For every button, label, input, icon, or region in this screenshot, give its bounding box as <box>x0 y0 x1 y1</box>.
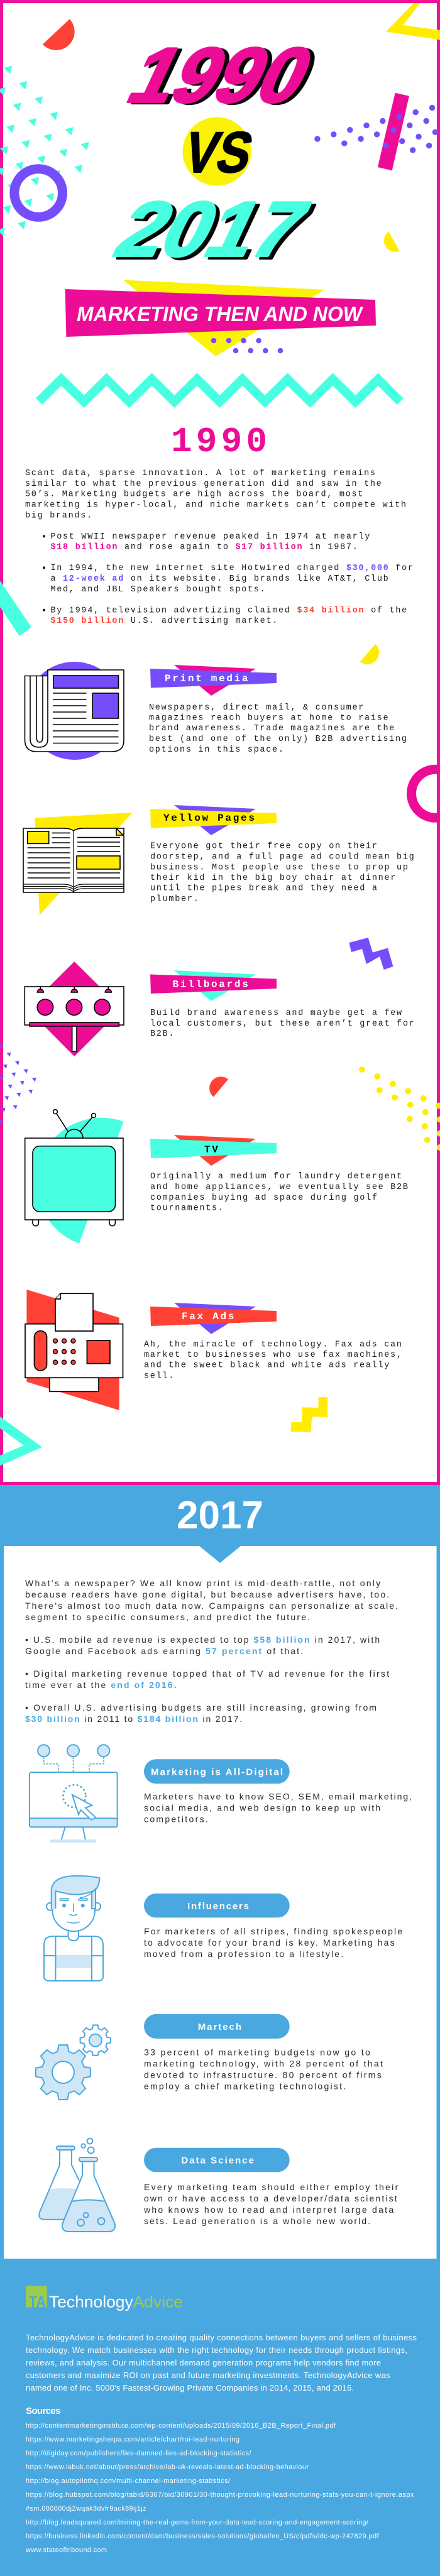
text: 1990 intro: similar to what the previous generation did and saw in the <box>25 480 382 489</box>
text: Martech description <box>144 2047 383 2091</box>
panel: 2017 section <box>0 1485 440 2576</box>
text: about TechnologyAdvice: technology. We match businesses with the right technology for their needs through product listings, <box>26 2345 407 2355</box>
label: Influencers <box>144 1894 290 1917</box>
list: 2017 bullets: • Digital marketing revenue topped that of TV ad revenue for the first <box>25 1669 390 1679</box>
text: Fax Ads description: Ah, the miracle of technology. Fax ads can <box>144 1340 403 1349</box>
label: Yellow Pages <box>150 805 277 835</box>
list: 2017 bullets: • Overall U.S. advertising budgets are still increasing, growing from <box>25 1702 377 1713</box>
label: Billboards <box>150 970 277 1001</box>
decoration: purple zigzag <box>349 938 393 970</box>
icon: fax machine <box>25 1290 123 1410</box>
list: 1990 bullets: $150 billion U.S. advertising market. <box>50 617 278 626</box>
icon: newspaper <box>25 662 124 760</box>
icon: monitor with cursor <box>30 1745 118 1843</box>
text: Martech description: devoted to infrastructure. 80 percent of firms <box>144 2070 382 2080</box>
list: source links: http://contentmarketinginstitute.com/wp-content/uploads/2015/09/2016_B2B_Report_Final.pdf <box>26 2422 336 2430</box>
title: 1990: 1990 <box>116 33 326 119</box>
icon: influencer person <box>44 1876 103 1981</box>
text: 1990 intro: big brands. <box>25 512 93 520</box>
title: 2017: 2017 <box>103 187 322 273</box>
text: 2017 intro <box>25 1578 399 1622</box>
label: Martech <box>144 2014 290 2039</box>
list: 1990 bullets: In 1994, the new internet site Hotwired charged $30,000 for <box>50 564 414 573</box>
text: Print media description: Newspapers, direct mail, & consumer <box>149 703 365 713</box>
heading: 1990: 1990 <box>171 422 267 462</box>
text: Martech description: marketing technology, with 28 percent of that <box>144 2059 383 2069</box>
text: Data Science description <box>143 2182 399 2226</box>
list: source links: http://blog.leadsquared.com/mining-the-real-gems-from-your-data-lead-scoring-and-engagement-scoring/ <box>26 2519 368 2526</box>
text: Yellow Pages description: business. Most people use these to prop up <box>150 863 409 872</box>
text: Yellow Pages description: Everyone got their free copy on their <box>150 842 378 851</box>
logo: TechnologyAdvice: TA <box>29 2294 46 2311</box>
text: 2017 intro: There’s almost too much data now. Campaigns can personalize at scale, <box>25 1601 399 1611</box>
text: 2017 intro: What’s a newspaper? We all know print is mid-death-rattle, not only <box>25 1578 381 1588</box>
list: 1990 bullets <box>43 532 414 626</box>
text: Yellow Pages description <box>150 842 415 904</box>
list: source links: www.stateofinbound.com <box>25 2546 107 2554</box>
text: Fax Ads description: market to businesses who use fax machines, <box>144 1351 403 1360</box>
text: Fax Ads description: and the sweet black and white ads really <box>144 1361 390 1371</box>
list: 2017 bullets: • U.S. mobile ad revenue is expected to top $58 billion in 2017, with <box>25 1635 380 1645</box>
text: about TechnologyAdvice: reviews, and analysis. Our multichannel demand generation programs help vendors find more <box>26 2358 381 2367</box>
list: 1990 bullets: Post WWII newspaper revenue peaked in 1974 at nearly <box>50 532 371 542</box>
text: Fax Ads description <box>144 1340 403 1381</box>
text: 1990 intro <box>25 469 407 520</box>
decoration: red half circle <box>209 1077 228 1097</box>
text: Print media description: best (and one of the only) B2B advertising <box>149 735 408 744</box>
text: Influencers description: to advocate for your brand is key. Marketing has <box>144 1937 395 1948</box>
text: TV description: companies buying ad space during golf <box>150 1193 378 1203</box>
label: Billboards: Billboards <box>172 979 250 990</box>
text: Data Science description: sets. Lead generation is a whole new world. <box>144 2216 371 2226</box>
label: Data Science <box>144 2148 290 2172</box>
text: Billboards description: local customers, but these aren’t great for <box>150 1019 415 1029</box>
text: Influencers description: moved from a profession to a lifestyle. <box>144 1949 344 1959</box>
heading: 2017: 2017 <box>177 1494 263 1537</box>
decoration: cyan triangle outline <box>0 1417 42 1466</box>
list: 1990 bullets: $18 billion and rose again to $17 billion in 1987. <box>50 543 359 552</box>
decoration: cyan triangle pattern <box>0 65 89 236</box>
text: Yellow Pages description: their kid in the big boy chair at dinner <box>150 874 397 883</box>
text: Martech description: employ a chief marketing technologist. <box>144 2081 346 2091</box>
list: source links: http://blog.autopilothq.com/multi-channel-marketing-statistics/ <box>26 2477 230 2485</box>
text: TV description: Originally a medium for laundry detergent <box>150 1172 403 1181</box>
text: Print media description: brand awareness. Trade magazines are the <box>149 724 395 733</box>
text: Martech description: 33 percent of marketing budgets now go to <box>144 2047 371 2058</box>
subtitle banner: MARKETING THEN AND NOW <box>77 302 364 326</box>
list: source links <box>25 2422 414 2554</box>
logo: TechnologyAdvice: TechnologyAdvice <box>49 2293 183 2311</box>
label: Print media: Print media <box>165 673 250 684</box>
list: source links: https://business.linkedin.com/content/dam/business/sales-solutions/global/en_US/c/pdfs/idc-wp-247829.pdf <box>26 2533 380 2540</box>
label: Marketing is All-Digital <box>144 1759 290 1784</box>
text: Influencers description <box>144 1926 403 1959</box>
text: Yellow Pages description: doorstep, and a full page ad could mean big <box>150 852 415 862</box>
text: Print media description <box>149 703 408 755</box>
heading: Sources: Sources <box>26 2406 60 2416</box>
list: 2017 bullets: time ever at the end of 2016. <box>25 1680 177 1690</box>
decoration: pink bar <box>378 93 409 170</box>
decoration: yellow triangle outline <box>386 3 440 40</box>
arrow: section pointer <box>199 1546 241 1563</box>
text: Yellow Pages description: plumber. <box>150 895 199 904</box>
text: 2017 intro: because readers have gone digital, but because advertisers have, too. <box>25 1589 390 1599</box>
text: 1990 intro: marketing is hyper-local, and niche markets can’t compete with <box>25 500 407 510</box>
text: Print media description: magazines reach buyers at home to raise <box>149 714 389 723</box>
text: Billboards description: Build brand awareness and maybe get a few <box>150 1009 403 1018</box>
text: Data Science description: Every marketing team should either employ their <box>144 2182 399 2192</box>
text: TV description: tournaments. <box>150 1204 224 1213</box>
text: Billboards description: B2B. <box>150 1029 175 1039</box>
text: 1990 intro: Scant data, sparse innovation. A lot of marketing remains <box>25 469 377 478</box>
decoration: pink ring <box>411 769 440 818</box>
list: 2017 bullets <box>25 1635 390 1724</box>
title: VS: VS <box>178 119 260 185</box>
label: Yellow Pages: Yellow Pages <box>163 813 256 824</box>
decoration: purple triangle pattern <box>0 1044 36 1124</box>
text: TV description: and home appliances, we eventually see B2B <box>150 1183 409 1192</box>
text: All-Digital description: competitors. <box>144 1814 209 1824</box>
text: Print media description: options in this space. <box>149 745 285 755</box>
text: TV description <box>150 1172 409 1213</box>
label: Martech: Martech <box>198 2022 241 2032</box>
text: 2017 intro: segment to specific consumers, and predict the future. <box>25 1612 311 1622</box>
icon: gears <box>36 2025 111 2100</box>
logo: TechnologyAdvice <box>26 2286 183 2311</box>
label: Fax Ads <box>150 1303 277 1334</box>
list: 2017 bullets: $30 billion in 2011 to $184 billion in 2017. <box>25 1714 243 1724</box>
text: Influencers description: For marketers of all stripes, finding spokespeople <box>144 1926 403 1936</box>
panel: 1990 section <box>0 0 440 1485</box>
decoration: purple ring <box>14 169 63 217</box>
decoration: yellow dots <box>359 1066 440 1151</box>
decoration: red half circle <box>43 19 75 50</box>
decoration: banner dots <box>211 338 283 353</box>
label: TV: TV <box>204 1144 220 1155</box>
list: source links: http://digiday.com/publishers/lies-damned-lies-ad-blocking-statistics/ <box>26 2450 251 2457</box>
icon: television <box>25 1110 123 1244</box>
text: Billboards description <box>150 1009 415 1039</box>
decoration: yellow half circle <box>384 231 400 252</box>
text: All-Digital description: social media, and web design to keep up with <box>144 1802 381 1812</box>
text: Data Science description: who knows how to read and interpret large data <box>143 2205 394 2215</box>
decoration: yellow zigzag <box>291 1397 327 1432</box>
label: TV <box>150 1135 277 1166</box>
panel: white content card <box>4 1546 436 2259</box>
text: Yellow Pages description: until the pipes break and they need a <box>150 884 378 894</box>
list: 2017 bullets: Google and Facebook ads earning 57 percent of that. <box>25 1646 304 1656</box>
text: All-Digital description <box>144 1791 412 1824</box>
label: Print media <box>150 665 277 696</box>
decoration: cyan bar <box>0 581 31 636</box>
label: Marketing is All-Digital: Marketing is All-Digital <box>151 1767 283 1777</box>
label: Fax Ads: Fax Ads <box>182 1311 236 1322</box>
text: about TechnologyAdvice: TechnologyAdvice is dedicated to creating quality connections between buyers and sellers of business <box>26 2333 417 2342</box>
text: Data Science description: own or have access to a developer/data scientist <box>144 2193 398 2203</box>
list: source links: #sm.000000dj2wqak3dvfr9ack89ij1jz <box>26 2505 146 2513</box>
icon: billboard <box>25 962 124 1056</box>
text: about TechnologyAdvice <box>26 2333 417 2392</box>
text: about TechnologyAdvice: customers and maximize ROI on past and future marketing investments. TechnologyAdvice was <box>26 2370 390 2380</box>
label: Influencers: Influencers <box>187 1901 249 1912</box>
decoration: yellow half circle <box>360 644 379 664</box>
icon: yellow pages book <box>23 813 133 915</box>
icon: flasks <box>39 2139 115 2232</box>
list: 1990 bullets: a 12-week ad on its website. Big brands like AT&T, Club <box>50 574 389 584</box>
text: about TechnologyAdvice: named one of Inc. 5000’s Fastest-Growing Private Companies in 2014, 2015, and 2016. <box>26 2383 354 2392</box>
list: 1990 bullets: Med, and JBL Speakers bought spots. <box>50 585 266 595</box>
decoration: purple dots <box>314 105 438 153</box>
text: All-Digital description: Marketers have to know SEO, SEM, email marketing, <box>144 1791 412 1801</box>
label: Data Science: Data Science <box>181 2156 254 2166</box>
text: 1990 intro: 50’s. Marketing budgets are high across the board, most <box>25 490 364 499</box>
text: Fax Ads description: sell. <box>144 1371 175 1381</box>
decoration: cyan zigzag <box>39 380 400 402</box>
list: source links: https://www.iabuk.net/about/press/archive/iab-uk-reveals-latest-ad-blocking-behaviour <box>26 2464 309 2471</box>
list: 1990 bullets: By 1994, television advertizing claimed $34 billion of the <box>50 606 408 616</box>
list: source links: https://www.marketingsherpa.com/article/chart/roi-lead-nurturing <box>26 2436 239 2443</box>
list: source links: https://blog.hubspot.com/blog/tabid/6307/bid/30901/30-thought-provoking-lead-nurturing-stats-you-can-t-ignore.aspx <box>26 2491 414 2499</box>
decoration: yellow circle behind VS <box>182 117 251 186</box>
subtitle banner <box>65 280 376 356</box>
